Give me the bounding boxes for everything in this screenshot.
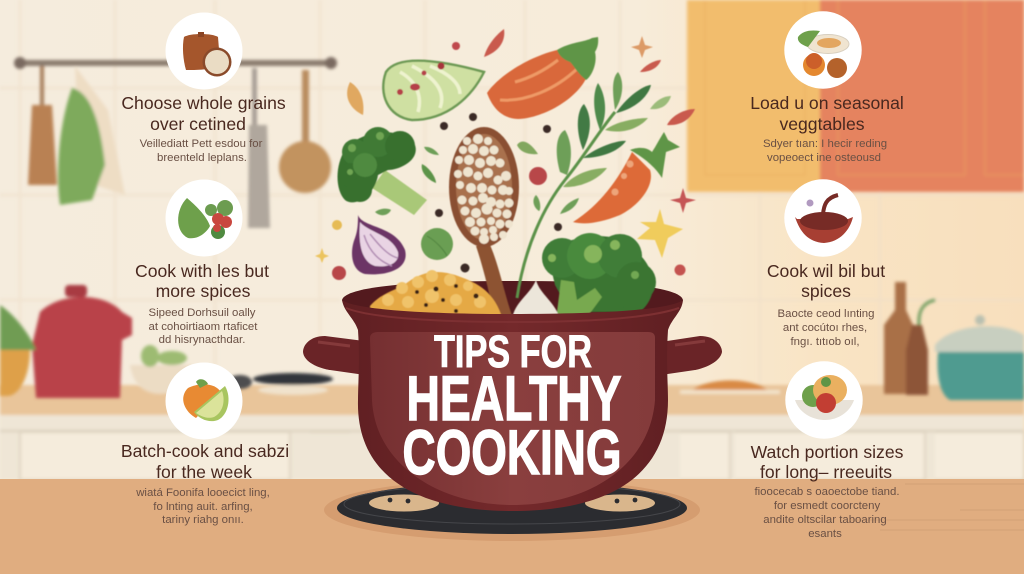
tip: whole grains: breenteld leplans.: [157, 152, 247, 164]
sparkles and star: [315, 36, 696, 263]
icon: leafy greens: [166, 180, 242, 256]
tip: seasonal vegetables: veggtables: [779, 114, 865, 134]
tip: seasonal vegetables: Sdyer tıan: I hecir reding: [763, 138, 887, 150]
tip: less oil: at cohoirtiaom rtaficet: [149, 321, 258, 333]
tip: whole grains: Veillediatt Pett esdou for: [140, 138, 263, 150]
icon: orange and lime: [166, 362, 242, 440]
tip: spices: spices: [801, 281, 851, 301]
icon: plated meal: [785, 361, 863, 439]
tip: spices: Baocte ceod lınting: [778, 308, 874, 320]
countertop: [0, 479, 1024, 574]
tip: less oil: more spices: [156, 281, 251, 301]
tip: spices: ant cocútoı rhes,: [783, 322, 867, 334]
grain pile in pot: [370, 270, 503, 320]
left counter items: [0, 285, 333, 398]
pot lip highlight: [346, 308, 679, 322]
red squash: [487, 37, 598, 119]
sprig of herbs: [517, 72, 671, 298]
left wall rail and utensils: [14, 57, 337, 228]
tip: portion sizes: fioocecab s oaoectobe tiand.: [754, 486, 900, 498]
pot rim back: [342, 281, 683, 320]
tip: batch cook: for the week: [156, 462, 252, 482]
lighter panel: [370, 332, 655, 505]
cabbage leaf: [383, 61, 484, 120]
tip: seasonal vegetables: vopeoect ine osteousd: [767, 152, 881, 164]
pot handles: [303, 336, 722, 376]
tip: batch cook: fo lnting auit. arfing,: [153, 501, 253, 513]
tip: seasonal vegetables: [750, 11, 904, 164]
tip: portion sizes: esants: [808, 528, 842, 540]
tip: spices: fngı. tıtıob oıl,: [790, 336, 860, 348]
tip: spices: [767, 179, 885, 348]
icon: plates of vegetables: [784, 11, 862, 89]
tip: less oil: Cook with les but: [135, 261, 269, 281]
cooking pot: [342, 300, 683, 511]
tip: portion sizes: [751, 361, 904, 540]
tip: portion sizes: for esmedt coorcteny: [774, 500, 880, 512]
tip: batch cook: [121, 362, 289, 526]
tip: whole grains: [121, 12, 286, 164]
title: TIPS FOR: [434, 326, 592, 377]
tip: less oil: Sipeed Dorhsuil oally: [148, 307, 256, 319]
tip: batch cook: wiatá Foonifa looecict ling,: [135, 487, 270, 499]
tip: whole grains: over cetined: [150, 114, 246, 134]
title: [402, 326, 622, 488]
icon: bowl of spice: [784, 179, 862, 257]
icon: grain jar and bowl: [166, 12, 242, 90]
tip: batch cook: Batch-cook and sabzi: [121, 441, 289, 461]
title: COOKING: [402, 418, 622, 488]
tip: seasonal vegetables: Load u on seasonal: [750, 93, 904, 113]
garlic: [512, 280, 560, 320]
red chili: [573, 132, 680, 223]
big broccoli: [542, 233, 656, 320]
tip: batch cook: tariny riahg onıı.: [162, 514, 244, 526]
tip: portion sizes: for long– rreeuits: [760, 462, 892, 482]
title: HEALTHY: [406, 364, 622, 434]
pot body: [342, 300, 683, 511]
broccoli left: [338, 127, 427, 215]
tip: spices: Cook wil bil but: [767, 261, 885, 281]
tip: less oil: [135, 180, 269, 346]
wooden spoon with grains: [449, 127, 519, 318]
tip: whole grains: Choose whole grains: [121, 93, 286, 113]
tip: portion sizes: andite oltscilar taboaring: [763, 514, 887, 526]
onion: [352, 215, 406, 274]
floating ingredients: [315, 29, 696, 320]
right counter items: [680, 282, 1024, 400]
stove burner: [324, 479, 700, 541]
tip: portion sizes: Watch portion sizes: [751, 442, 904, 462]
green pea leaf: [421, 228, 453, 260]
leaves and spice dots: [332, 29, 695, 280]
tip: less oil: dd hisrynacthdar.: [159, 334, 245, 346]
